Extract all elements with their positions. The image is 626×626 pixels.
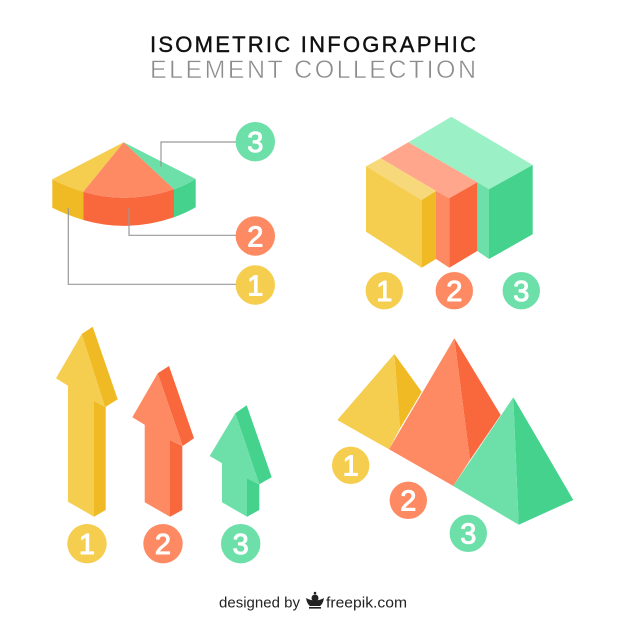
badge 3: 3: [513, 276, 529, 308]
badge 2: 2: [400, 486, 416, 518]
icon: freepik logo: [306, 592, 324, 609]
badge 3: [503, 272, 540, 309]
leader lines: [68, 142, 237, 284]
arrow: orange: [132, 366, 194, 517]
badge 1: [332, 447, 369, 484]
arrow: green: [210, 405, 272, 517]
badge 2: [436, 272, 473, 309]
panel: arrows: [56, 327, 272, 563]
badge 2: [390, 482, 427, 519]
pie slice: yellow: [52, 142, 124, 220]
badge 2: 2: [155, 529, 171, 561]
pyramid: orange: [389, 338, 501, 486]
title: [150, 32, 476, 84]
badge 3: [221, 524, 260, 563]
badge 2: [236, 216, 275, 256]
panel: pie chart: [52, 122, 275, 305]
badge 1: 1: [247, 270, 263, 302]
credit text right: freepik.com: [326, 594, 407, 612]
footer credit: [219, 592, 407, 612]
badge 1: 1: [343, 451, 359, 483]
badge 3: [236, 122, 275, 161]
badge 1: [366, 272, 403, 309]
pie slice: orange: [83, 142, 174, 226]
arrow: yellow: [56, 327, 118, 517]
badge 2: 2: [247, 221, 263, 253]
badge 1: 1: [79, 529, 95, 561]
badge 2: 2: [446, 276, 462, 308]
badge 3: 3: [460, 519, 476, 551]
badge 1: [236, 265, 275, 305]
panel: pyramids: [332, 338, 573, 552]
heading line 2: ELEMENT COLLECTION: [150, 56, 476, 84]
badge 3: 3: [247, 127, 263, 159]
credit text left: designed by: [219, 594, 300, 612]
heading line 1: ISOMETRIC INFOGRAPHIC: [150, 32, 476, 57]
badge 1: 1: [376, 276, 392, 308]
block: yellow: [366, 158, 436, 268]
pie slice: green: [124, 142, 196, 217]
badge 3: [450, 515, 487, 552]
block: orange: [381, 142, 477, 268]
panel: isometric blocks: [366, 117, 540, 309]
block: green: [408, 117, 533, 259]
badge 2: [143, 524, 183, 563]
pyramid: yellow: [337, 354, 422, 449]
pyramid: green: [453, 397, 573, 525]
badge 3: 3: [233, 529, 249, 561]
badge 1: [67, 524, 107, 563]
